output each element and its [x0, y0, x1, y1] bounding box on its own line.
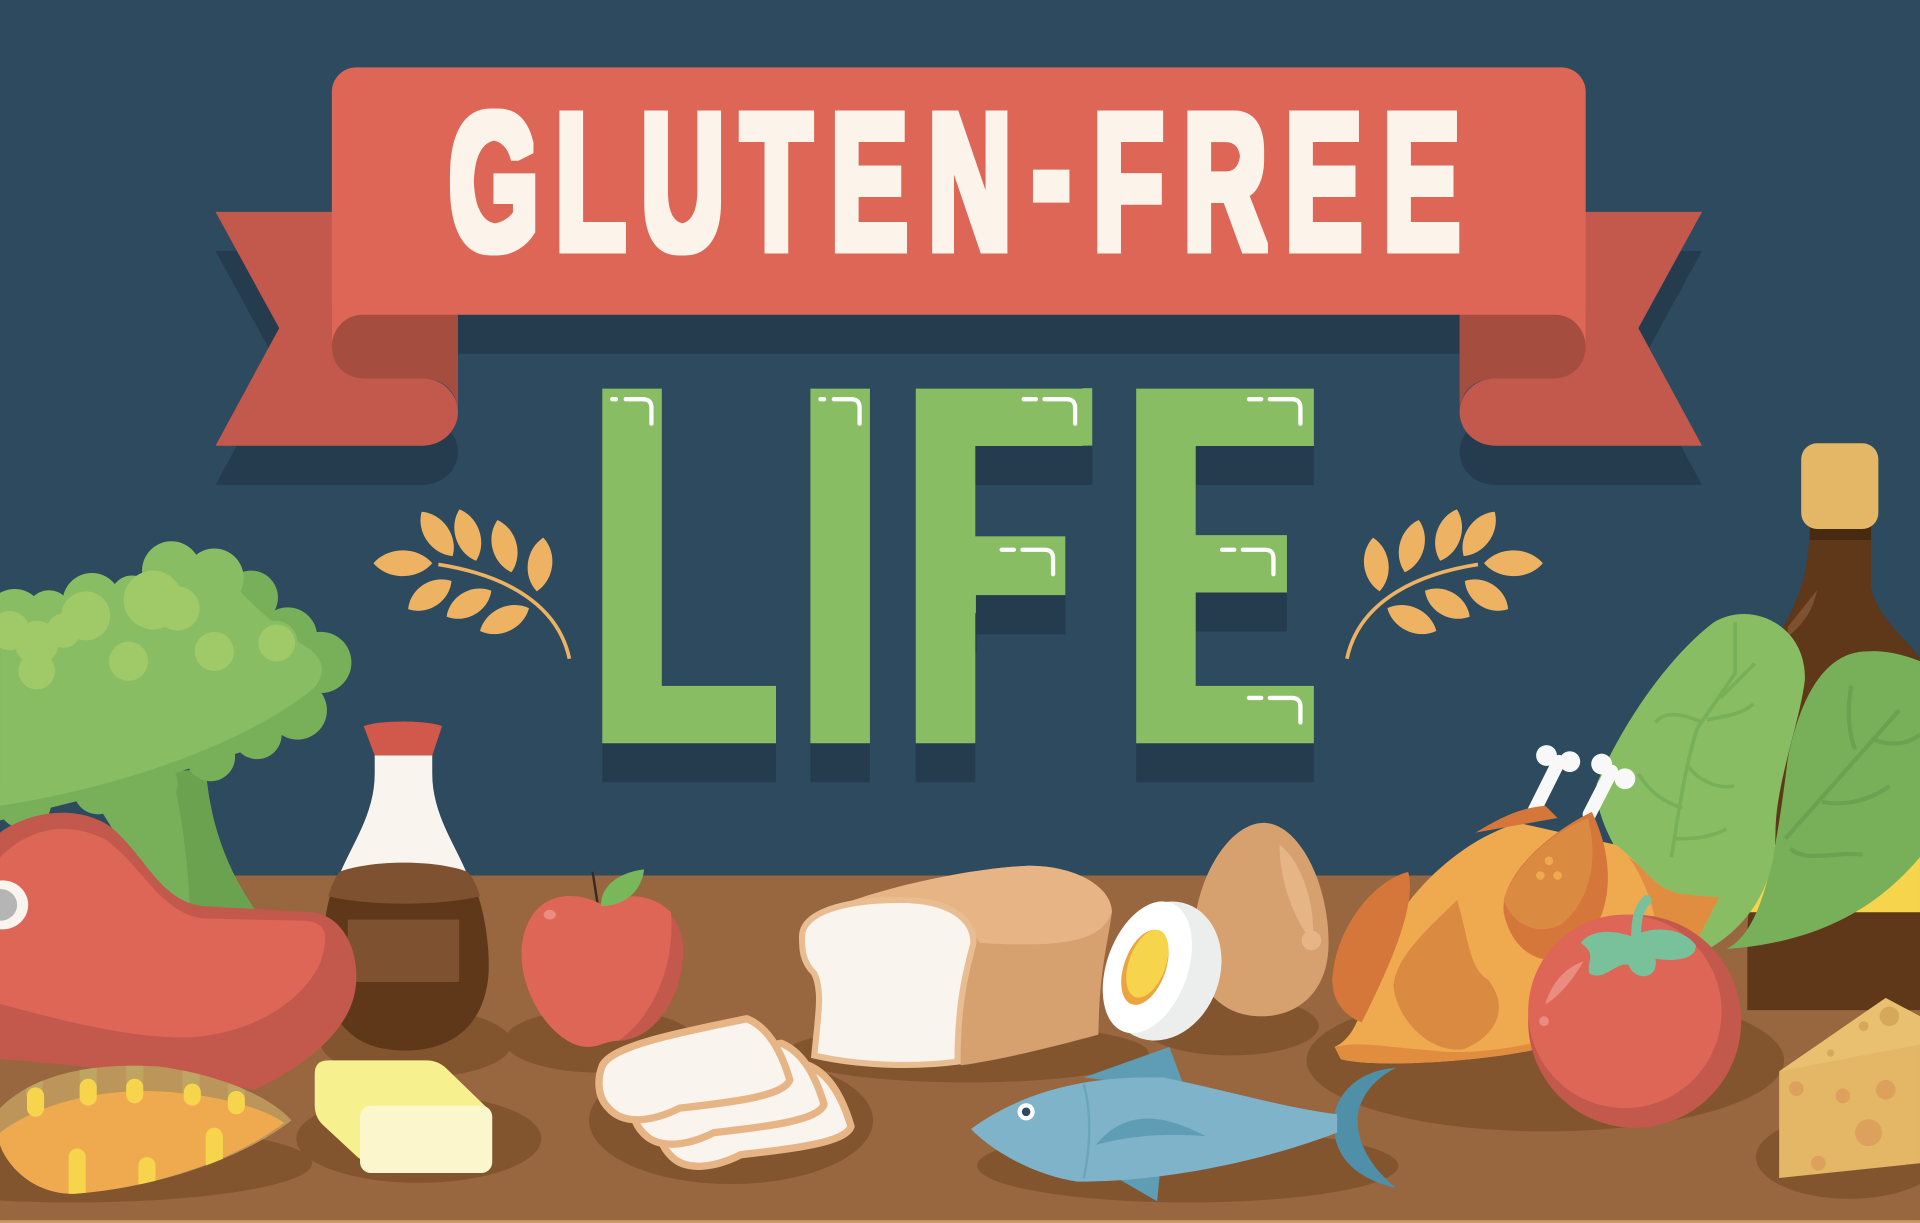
icon: roast chicken: [1332, 745, 1719, 1063]
table: [0, 875, 1920, 1223]
icon: halved egg: [1086, 885, 1240, 1057]
icon: butter: [315, 1060, 492, 1173]
ribbon shadow: [458, 315, 1460, 354]
icon: tomato: [1528, 900, 1741, 1128]
icon: sweet potato: [0, 1066, 292, 1194]
icon: wheat left: [373, 505, 569, 659]
icon: whole egg: [1194, 823, 1329, 1016]
icon: apple: [522, 869, 683, 1047]
icon: fish: [971, 1047, 1396, 1201]
icon: spinach leaves: [1596, 614, 1920, 955]
title: LIFE: LIFE: [589, 278, 1329, 854]
icon: wine bottle: [1747, 443, 1920, 1010]
ribbon main band: [332, 67, 1586, 347]
icon: bread loaf: [802, 866, 1112, 1065]
ribbon banner: [216, 67, 1702, 485]
ribbon right tail: [1460, 212, 1702, 446]
LIFE letter arm adjustments: [972, 386, 1329, 785]
front leaf: [1596, 614, 1805, 955]
bones: [1534, 745, 1635, 814]
icon: cheese: [1779, 998, 1920, 1178]
title: GLUTEN-FREE: GLUTEN-FREE: [449, 62, 1460, 290]
back leaf: [1727, 651, 1920, 949]
icon: soy sauce bottle: [323, 722, 489, 1051]
icon: bread slices: [599, 1019, 851, 1166]
letter highlights: [612, 399, 1300, 722]
icon: broccoli: [0, 541, 351, 924]
ribbon left tail: [216, 212, 458, 446]
icon: steak: [0, 813, 356, 1090]
icon: wheat right: [1347, 505, 1543, 659]
